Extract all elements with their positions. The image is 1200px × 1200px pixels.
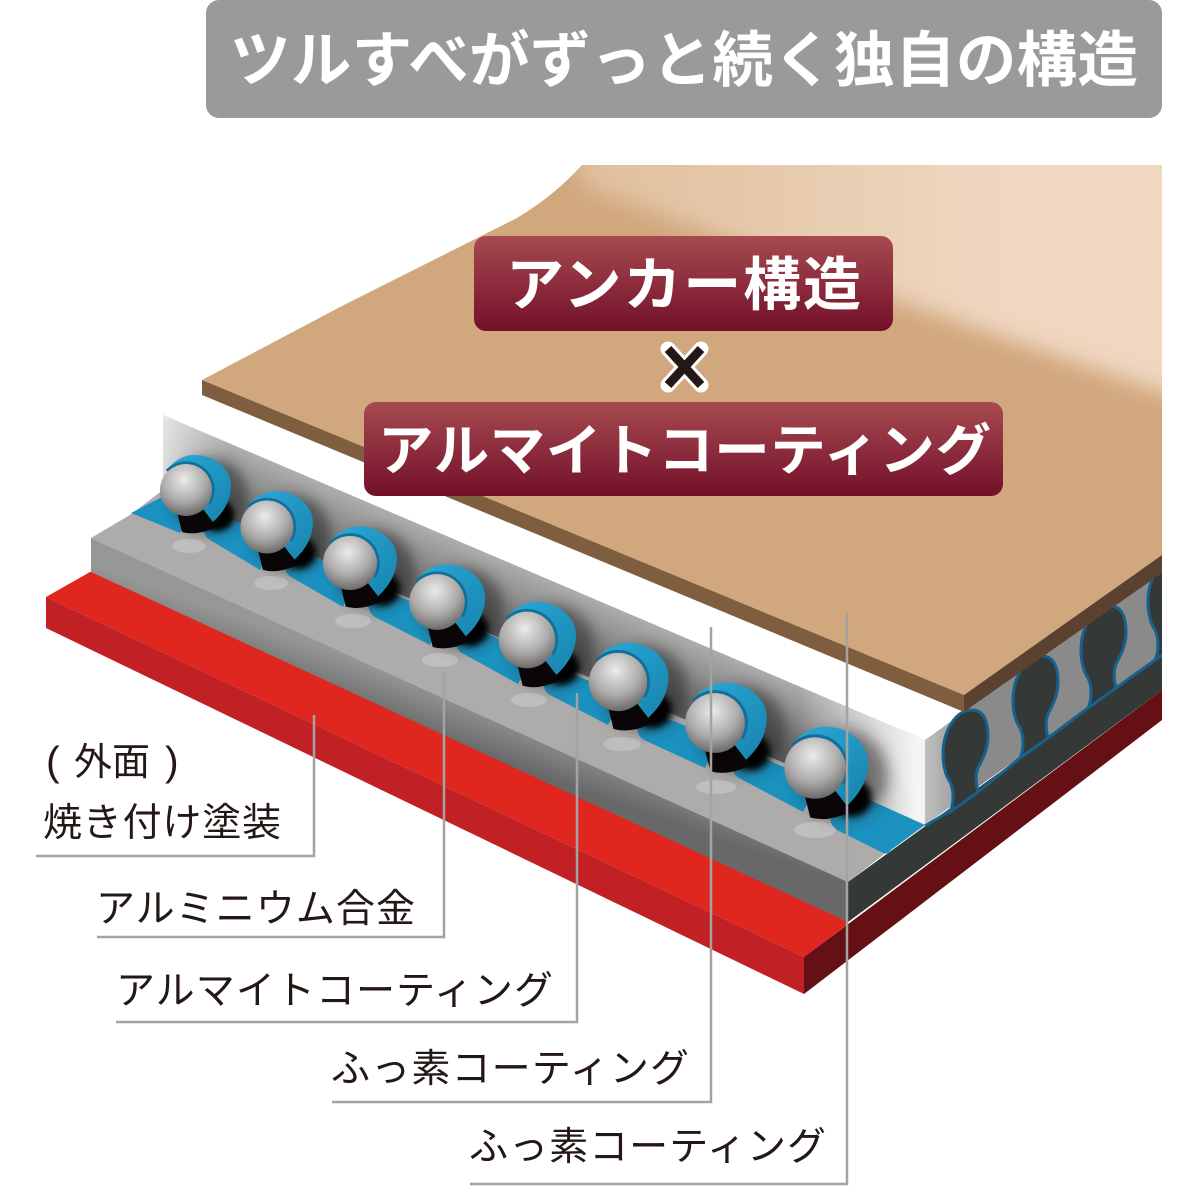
anchor ball 5 bbox=[499, 602, 595, 688]
layer: wall of fluorine coating bbox=[163, 415, 1162, 825]
label: aluminium alloy: アルミニウム合金 bbox=[96, 888, 415, 931]
dimples on aluminium bbox=[172, 539, 836, 838]
anchor ball 1 bbox=[160, 455, 248, 534]
anchor ball 7 bbox=[685, 683, 786, 774]
layer: top tan board bbox=[202, 165, 1162, 712]
anchor bulbs on cut face bbox=[924, 573, 1162, 828]
blue anchor tabs bbox=[131, 497, 925, 854]
title banner bbox=[206, 0, 1162, 118]
layered structure diagram bbox=[46, 120, 1200, 994]
label: baked coating: ( bbox=[46, 738, 60, 784]
label: alumite coating bbox=[116, 693, 577, 1022]
layer: aluminium alloy bbox=[91, 490, 1162, 922]
anchor ball 3 bbox=[323, 526, 414, 609]
label: fluorine coating outer: ふっ素コーティング bbox=[469, 1126, 826, 1169]
label: baked coating: 外面 bbox=[74, 742, 150, 784]
anchor ball 8 bbox=[784, 727, 888, 820]
label: fluorine coating outer bbox=[469, 613, 847, 1184]
label: alumite coating: アルマイトコーティング bbox=[116, 970, 553, 1013]
anchor ball 6 bbox=[589, 643, 687, 731]
callout: alumite coating: アルマイトコーティング bbox=[378, 420, 991, 482]
title banner: ツルすべがずっと続く独自の構造 bbox=[230, 26, 1138, 94]
label: aluminium alloy bbox=[96, 672, 444, 937]
label: baked coating: 焼き付け塗装 bbox=[43, 802, 281, 845]
label: baked coating bbox=[36, 715, 314, 856]
anchor ball 4 bbox=[409, 564, 503, 649]
layer: red baked coating bbox=[46, 570, 1162, 994]
callout: alumite coating bbox=[364, 402, 1003, 496]
anchor ball 2 bbox=[240, 491, 330, 572]
label: baked coating: ) bbox=[165, 738, 179, 784]
callout: anchor structure: アンカー構造 bbox=[506, 253, 861, 318]
label: fluorine coating inner: ふっ素コーティング bbox=[331, 1048, 689, 1091]
multiply sign bbox=[668, 349, 701, 385]
callout: anchor structure bbox=[474, 236, 893, 331]
label: fluorine coating inner bbox=[331, 627, 711, 1102]
